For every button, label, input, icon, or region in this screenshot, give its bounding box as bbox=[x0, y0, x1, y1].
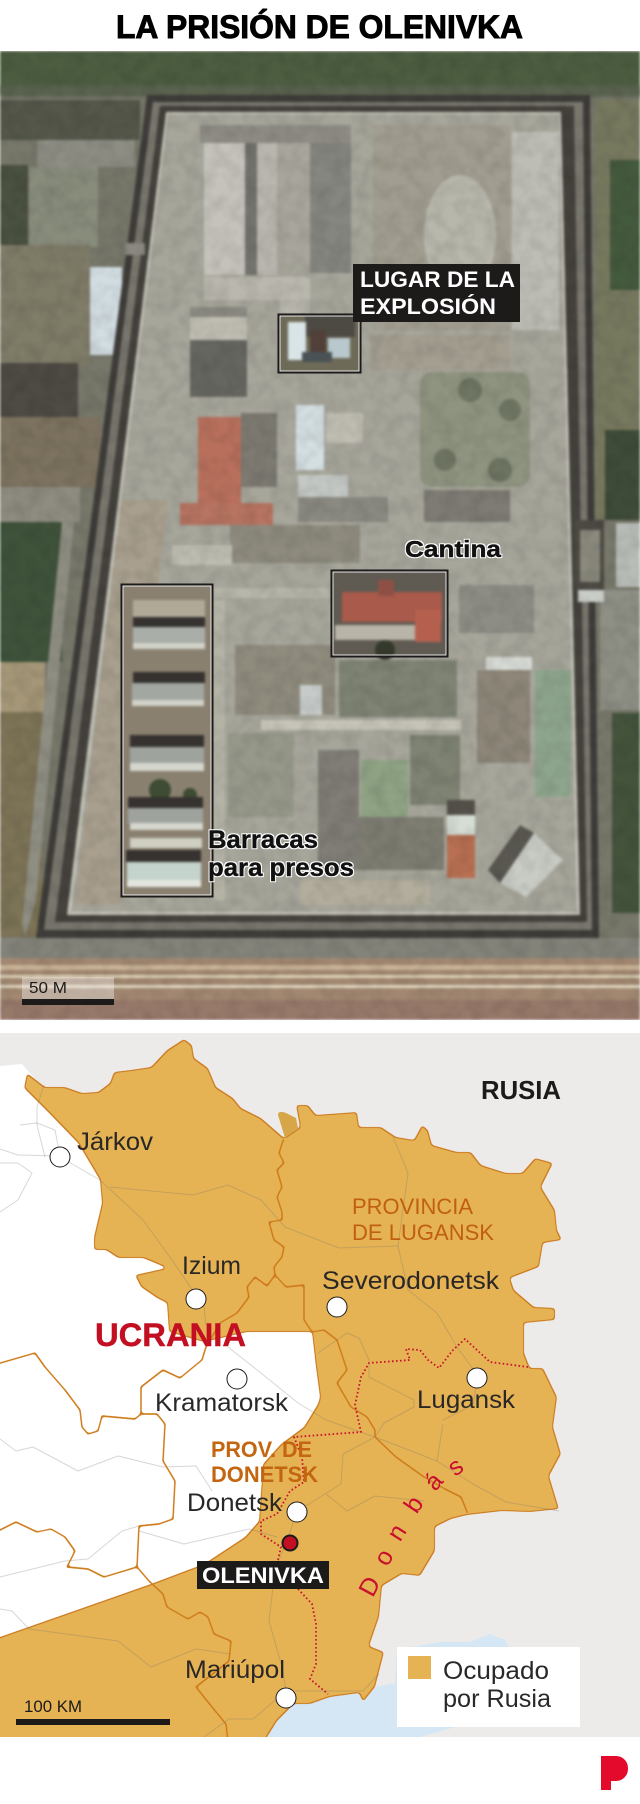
perimeter corner tower bbox=[580, 519, 605, 591]
photo texture bbox=[0, 51, 640, 1020]
highlighted area: canteen imagery bbox=[332, 571, 447, 660]
legend: por Rusia bbox=[443, 1685, 551, 1713]
label: Donetsk province: PROV. DE bbox=[211, 1437, 312, 1462]
label: Donbas bbox=[358, 1461, 464, 1596]
city: Kramatorsk bbox=[157, 1368, 288, 1411]
Sea of Azov bbox=[267, 1634, 510, 1737]
occupied territory bbox=[0, 1039, 562, 1765]
city: Luhansk bbox=[417, 1368, 516, 1414]
label: explosion site: LUGAR DE LA bbox=[360, 267, 515, 292]
frame: canteen bbox=[332, 570, 448, 656]
label: barracks: Barracas bbox=[208, 826, 318, 854]
city: Luhansk: Lugansk bbox=[417, 1386, 516, 1414]
highlighted area: explosion site imagery bbox=[279, 315, 360, 372]
roads bbox=[0, 1085, 559, 1737]
label: Donetsk province: DONETSK bbox=[211, 1462, 318, 1487]
scale bar: 100 km bbox=[16, 1697, 170, 1725]
scale bar: 100 km: 100 KM bbox=[24, 1697, 82, 1716]
frame highlight: barracks bbox=[123, 586, 211, 895]
scale bar: 50 m: 50 M bbox=[29, 980, 67, 997]
interior buildings bbox=[200, 125, 351, 143]
title: LA PRISIÓN DE OLENIVKA bbox=[116, 9, 523, 45]
Donbas dotted boundary bbox=[261, 1339, 528, 1694]
city: Izium: Izium bbox=[182, 1252, 241, 1280]
label: Luhansk province: DE LUGANSK bbox=[352, 1220, 494, 1245]
frame highlight: explosion site bbox=[280, 316, 359, 371]
city: Severodonetsk: Severodonetsk bbox=[322, 1267, 500, 1295]
logo: red P bbox=[601, 1756, 628, 1790]
frame highlight: canteen bbox=[333, 572, 446, 655]
small Russian-border enclave bbox=[278, 1112, 298, 1138]
marker: Olenivka bbox=[282, 1536, 298, 1550]
frame: explosion site bbox=[278, 314, 360, 372]
city: Izium bbox=[184, 1256, 240, 1310]
label: Donbas: D bbox=[353, 1572, 386, 1601]
outer walls bbox=[36, 95, 599, 938]
scale bar: 50 m bbox=[22, 977, 114, 1005]
frame: barracks bbox=[122, 584, 212, 896]
label: barracks: para presos bbox=[208, 854, 354, 882]
label: Donbas: n bbox=[381, 1519, 412, 1546]
label: Luhansk province bbox=[354, 1198, 494, 1240]
satellite ground imagery bbox=[0, 51, 640, 1020]
label: Donbas: s bbox=[442, 1452, 469, 1482]
label: canteen: Cantina bbox=[405, 536, 501, 562]
city: Kramatorsk: Kramatorsk bbox=[155, 1389, 289, 1417]
panel: satellite photo of the prison bbox=[0, 51, 640, 1020]
label: Russia: RUSIA bbox=[481, 1075, 561, 1105]
legend: Ocupado bbox=[443, 1657, 549, 1685]
city: Severodonetsk bbox=[322, 1267, 500, 1317]
legend bbox=[397, 1647, 580, 1727]
label: explosion site: EXPLOSIÓN bbox=[360, 294, 496, 319]
city: Mariupol: Mariúpol bbox=[185, 1656, 285, 1684]
highlighted area: barracks imagery bbox=[122, 585, 212, 896]
Ukraine territory bbox=[0, 1064, 320, 1637]
label: Luhansk province: PROVINCIA bbox=[352, 1194, 473, 1219]
city: Kharkiv: Járkov bbox=[77, 1128, 154, 1156]
label: Olenivka: OLENIVKA bbox=[202, 1563, 324, 1588]
city: Mariupol bbox=[185, 1656, 296, 1708]
label: Donbas: o bbox=[368, 1544, 399, 1571]
label: Donbas: b bbox=[398, 1491, 429, 1518]
label: barracks bbox=[208, 826, 354, 882]
panel: location map bbox=[0, 1033, 640, 1765]
province borders bbox=[0, 1138, 468, 1750]
Russia background bbox=[0, 1033, 640, 1737]
city: Donetsk: Donetsk bbox=[187, 1489, 283, 1517]
label: Ukraine: UCRANIA bbox=[95, 1317, 246, 1353]
city: Kharkiv bbox=[50, 1128, 154, 1167]
city: Donetsk bbox=[189, 1493, 308, 1522]
label: Donetsk province bbox=[212, 1442, 318, 1482]
label: explosion site bbox=[353, 264, 520, 322]
label: Donbas: á bbox=[419, 1467, 449, 1496]
